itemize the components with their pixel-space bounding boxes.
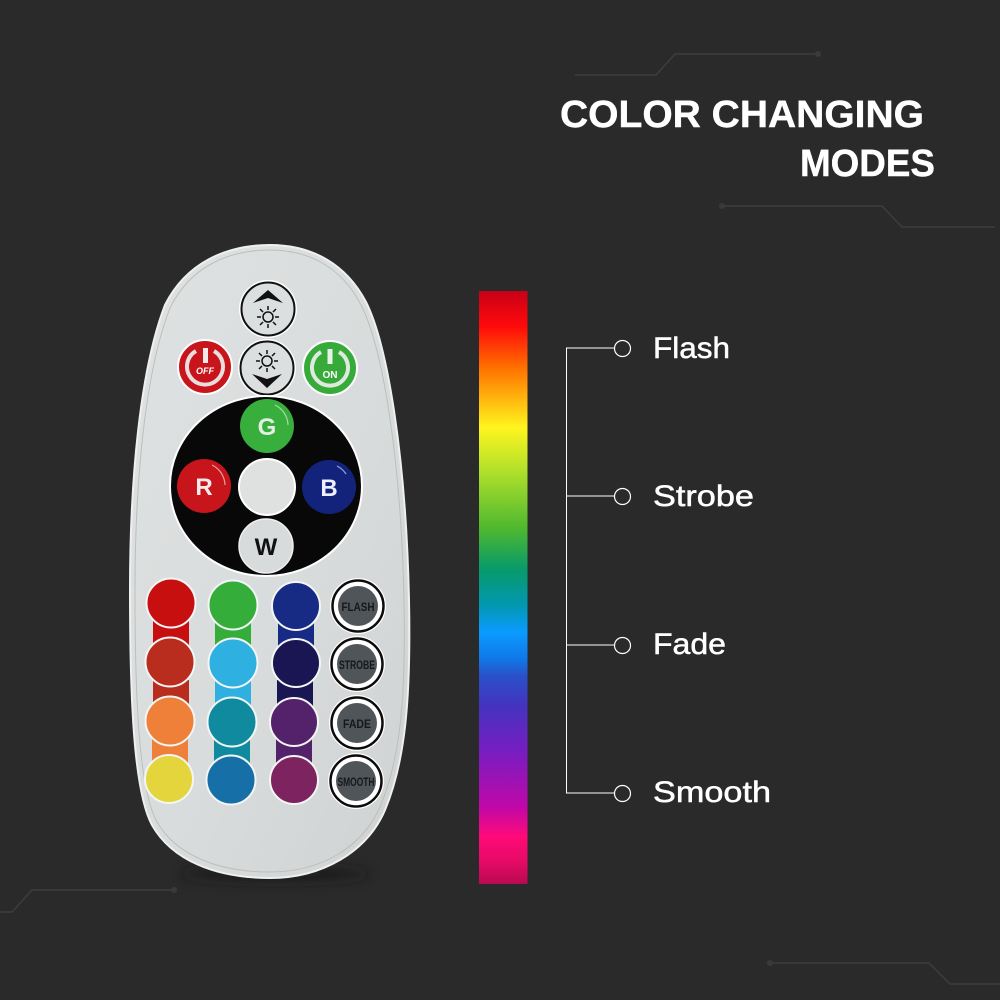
title: COLOR CHANGING bbox=[560, 94, 924, 136]
colour wheel bbox=[170, 396, 362, 576]
button: strobe bbox=[329, 636, 385, 692]
connector lines bbox=[566, 348, 614, 793]
mode buttons bbox=[328, 578, 386, 809]
button: W: W bbox=[255, 534, 278, 561]
mode: Smooth bbox=[614, 776, 771, 809]
remote control bbox=[130, 245, 409, 882]
button: on bbox=[303, 341, 357, 395]
button: off: OFF bbox=[196, 366, 214, 376]
button: B bbox=[302, 460, 356, 514]
decorative circuit line: top bbox=[575, 51, 821, 75]
button: strobe: STROBE bbox=[339, 660, 375, 672]
decorative circuit line: bottom left bbox=[0, 887, 177, 912]
button: on: ON bbox=[322, 370, 338, 381]
rainbow gradient bar bbox=[479, 291, 528, 884]
button: off bbox=[178, 340, 232, 394]
button: centre bbox=[239, 459, 295, 515]
mode: Fade: Fade bbox=[653, 628, 726, 661]
colour grid bbox=[145, 578, 320, 804]
button: R bbox=[177, 459, 231, 513]
button: smooth: SMOOTH bbox=[338, 777, 374, 789]
mode: Strobe bbox=[614, 480, 754, 513]
button: G bbox=[240, 399, 294, 453]
remote body bbox=[130, 245, 409, 878]
title bbox=[560, 94, 935, 185]
mode: Fade bbox=[614, 628, 726, 661]
decorative circuit line: upper right bbox=[719, 203, 995, 227]
mode: Flash: Flash bbox=[653, 332, 730, 365]
button: brightness down bbox=[238, 339, 296, 397]
button: B: B bbox=[320, 475, 338, 502]
decorative circuit line: bottom right bbox=[767, 960, 1000, 984]
mode: Strobe: Strobe bbox=[653, 480, 754, 513]
button: W bbox=[239, 519, 293, 573]
button: flash bbox=[330, 578, 386, 634]
button: fade: FADE bbox=[343, 719, 371, 731]
button: flash: FLASH bbox=[342, 602, 374, 614]
button: fade bbox=[329, 695, 385, 751]
mode: Flash bbox=[614, 332, 730, 365]
button: G: G bbox=[258, 414, 276, 441]
mode: Smooth: Smooth bbox=[653, 776, 771, 809]
button: R: R bbox=[195, 474, 213, 501]
title: MODES bbox=[800, 143, 935, 185]
button: smooth bbox=[328, 753, 384, 809]
button: brightness up bbox=[239, 280, 297, 338]
